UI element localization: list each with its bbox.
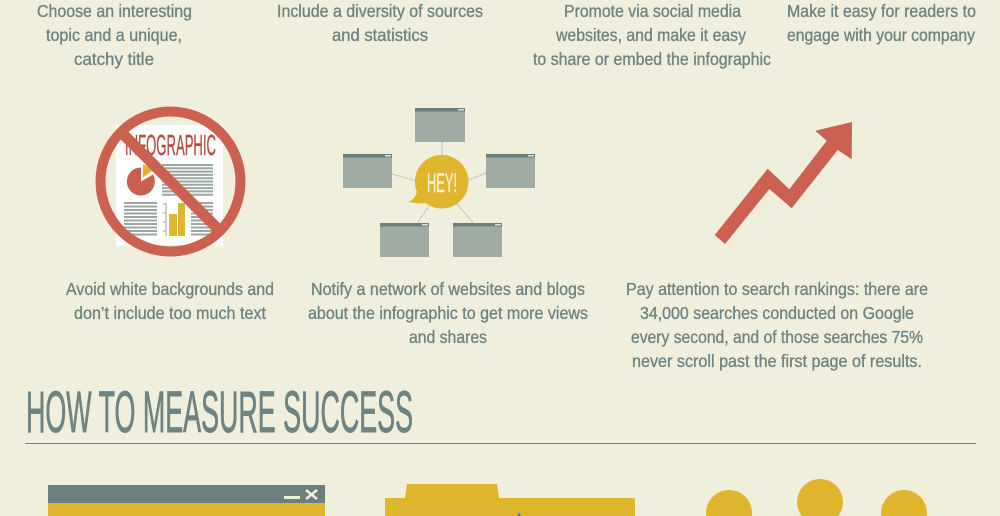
text: search rankings: 34,000 searches conducted on Google [640, 303, 914, 323]
text: promote via social media: Promote via social media [564, 1, 741, 21]
icon: browser window [48, 485, 325, 516]
icon: no infographic sign [100, 112, 240, 252]
text: avoid white backgrounds [66, 279, 274, 323]
window: bottom left [380, 223, 429, 257]
text: promote via social media [533, 1, 771, 69]
text: choose a topic: topic and a unique, [46, 25, 182, 45]
window: top [415, 108, 465, 142]
text: promote via social media: to share or embed the infographic [533, 49, 771, 69]
text: search rankings: never scroll past the first page of results. [632, 351, 922, 371]
text: notify network: and shares [409, 327, 487, 347]
icon: no infographic sign: INFOGRAPHIC [125, 130, 216, 162]
icon: rising arrow [715, 122, 852, 244]
speech bubble: hey [408, 155, 469, 208]
text: engage readers: engage with your company [787, 25, 975, 45]
text: diversity of sources: and statistics [332, 25, 428, 45]
text: avoid white backgrounds: don’t include too much text [74, 303, 266, 323]
speech bubble: hey: HEY! [427, 168, 457, 198]
text: promote via social media: websites, and make it easy [555, 25, 746, 45]
text: diversity of sources [277, 1, 483, 45]
text: avoid white backgrounds: Avoid white backgrounds and [66, 279, 274, 299]
text: choose a topic [37, 1, 192, 69]
text: engage readers: Make it easy for readers to [787, 1, 976, 21]
text: notify network: about the infographic to get more views [308, 303, 588, 323]
window: right [486, 154, 535, 188]
icon: people [706, 479, 927, 516]
text: choose a topic: catchy title [74, 49, 154, 69]
window: left [343, 154, 392, 188]
icon: network of websites [343, 108, 535, 257]
text: search rankings [626, 279, 928, 371]
text: engage readers [787, 1, 976, 45]
text: diversity of sources: Include a diversity of sources [277, 1, 483, 21]
icon: folder [385, 484, 635, 516]
text: notify network: Notify a network of websites and blogs [311, 279, 585, 299]
text: HOW TO MEASURE SUCCESS [26, 380, 413, 445]
text: choose a topic: Choose an interesting [37, 1, 192, 21]
text: notify network [308, 279, 588, 347]
window: bottom right [453, 223, 502, 257]
text: search rankings: every second, and of those searches 75% [631, 327, 923, 347]
text: search rankings: Pay attention to search rankings: there are [626, 279, 928, 299]
